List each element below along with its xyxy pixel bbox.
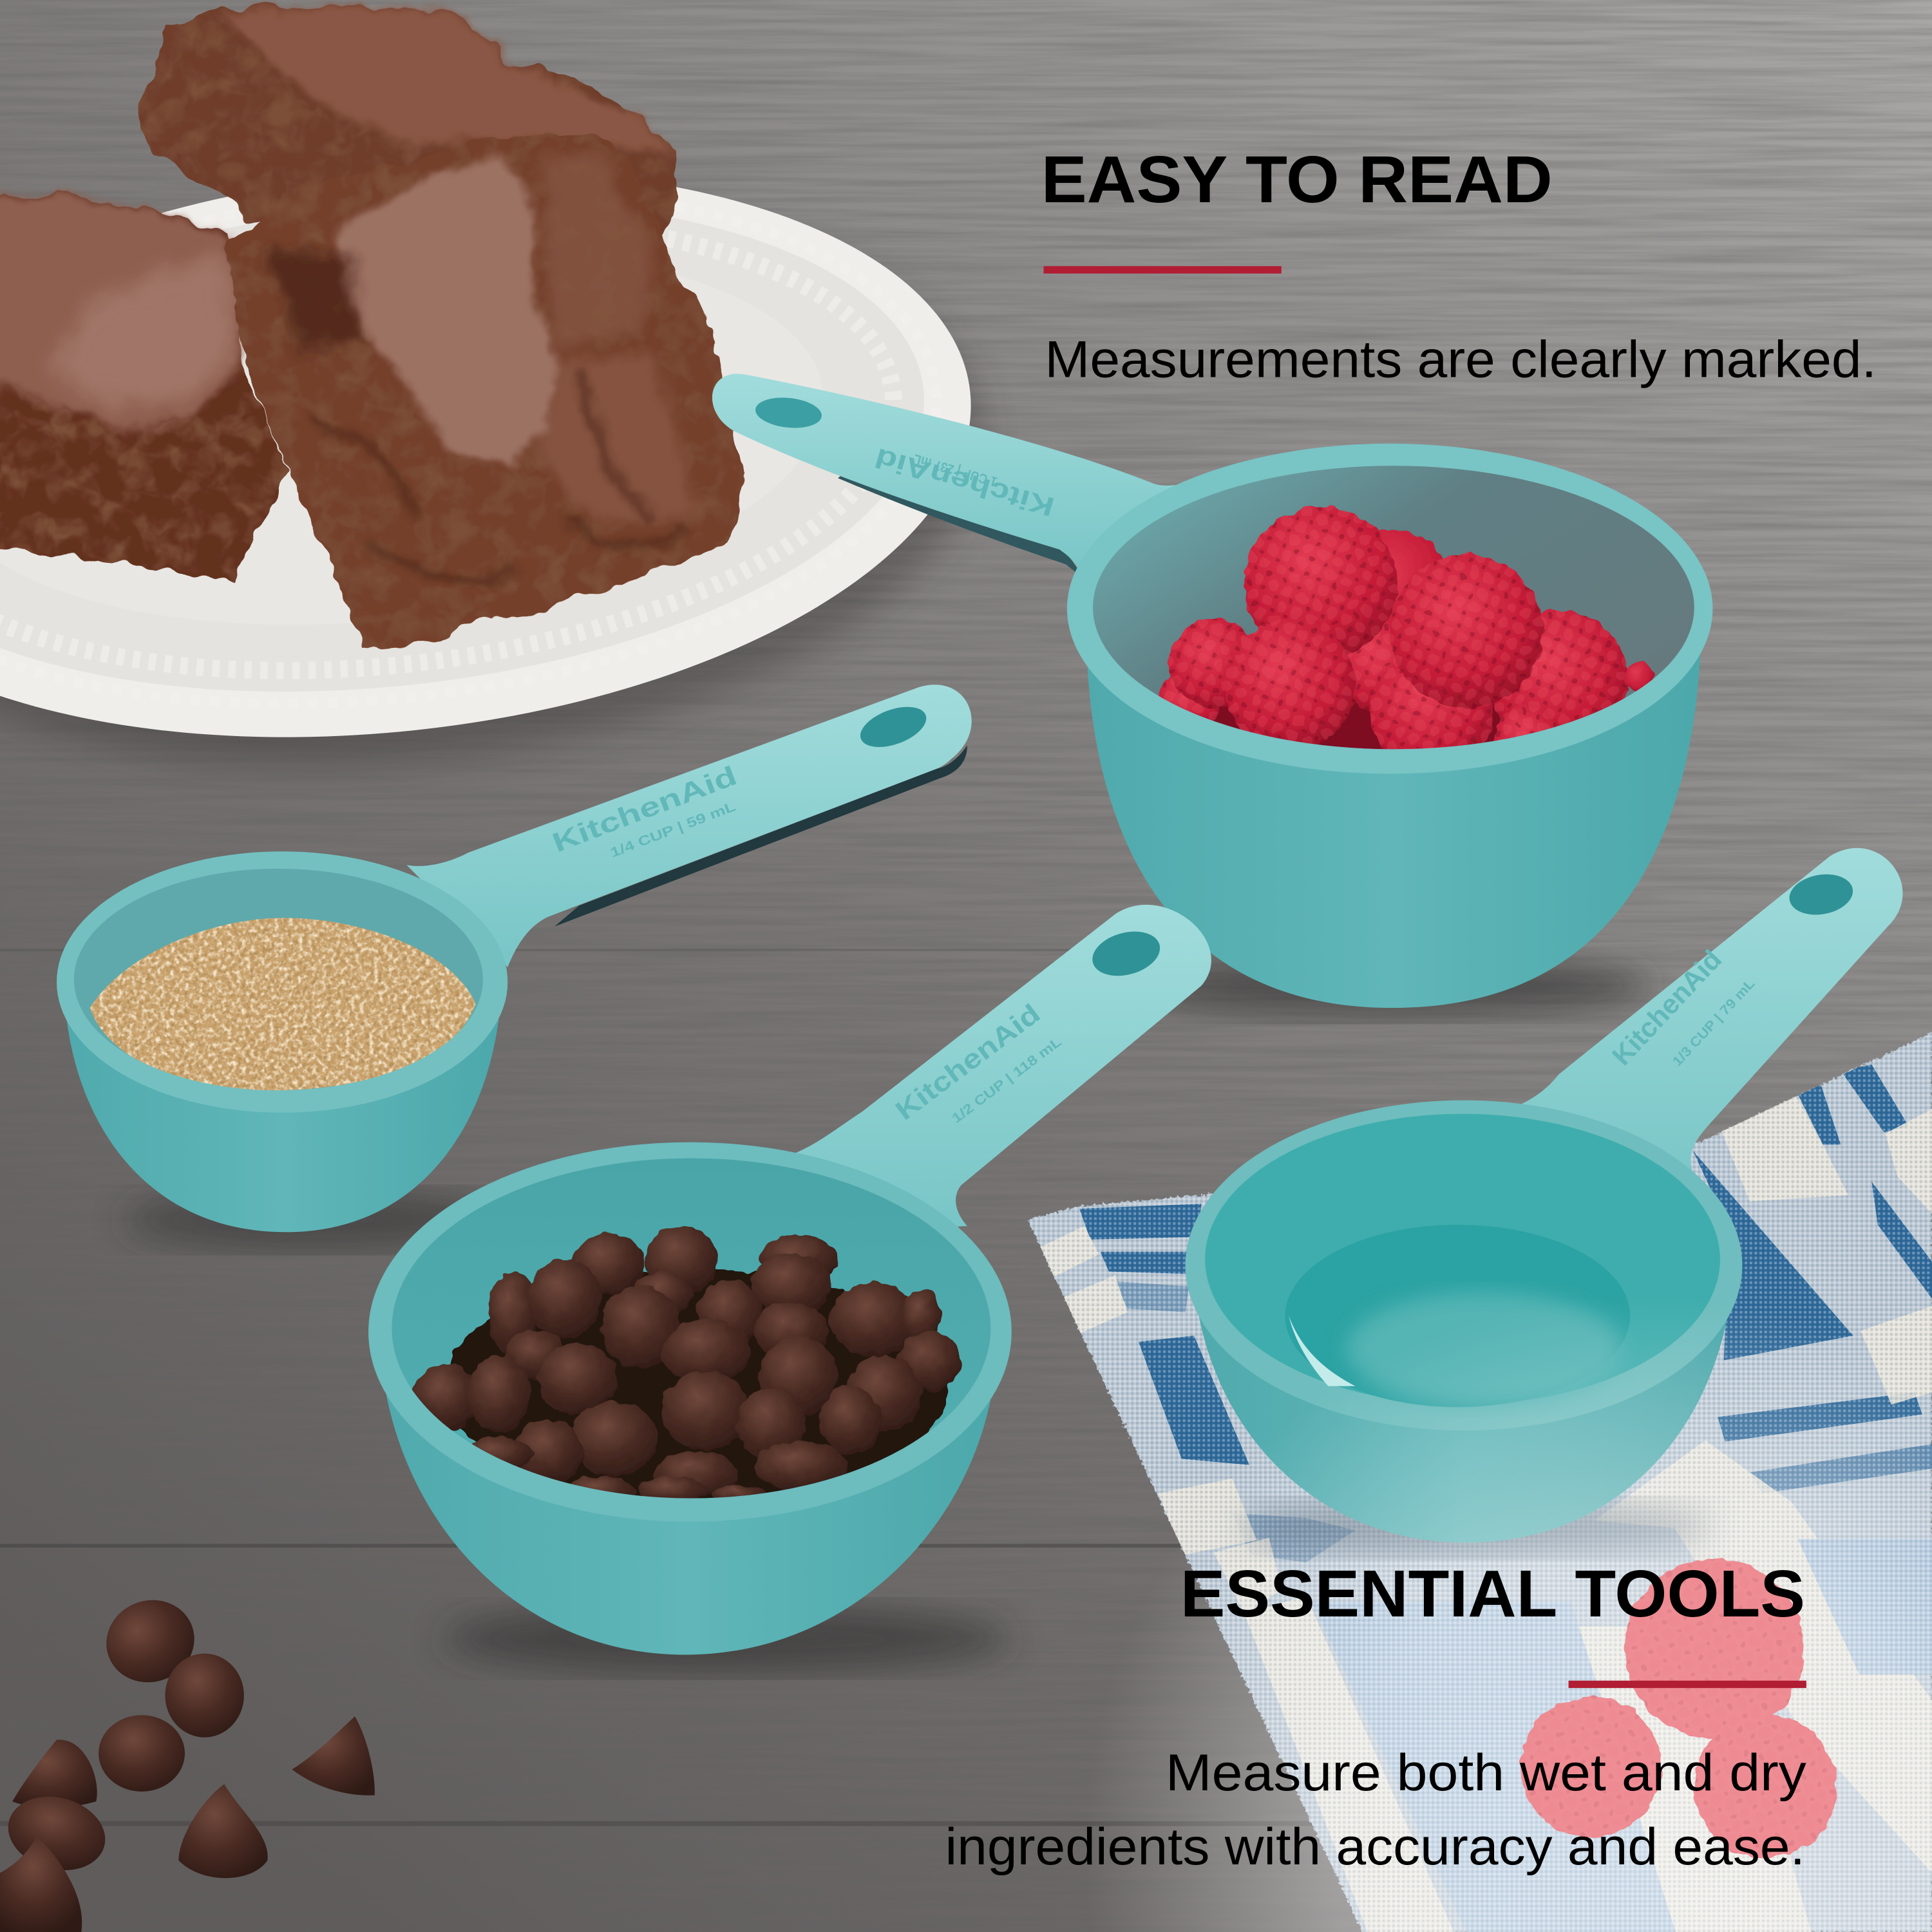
cup handle: left	[406, 685, 972, 967]
cup handle: right: 1/3 CUP | 79 mL	[1670, 976, 1758, 1069]
cup handle: top	[712, 374, 1232, 579]
description: easy to read: Measurements are clearly marked.	[1045, 330, 1877, 388]
heading: easy to read: EASY TO READ	[1041, 142, 1553, 216]
cup handle: left: KitchenAid	[548, 760, 741, 858]
towel	[1010, 1023, 1932, 1932]
heading: essential tools: ESSENTIAL TOOLS	[1180, 1556, 1805, 1631]
cup handle: right	[1510, 848, 1902, 1201]
cup handle: top: 1 CUP | 237 mL	[912, 451, 999, 489]
description: essential tools	[945, 1744, 1807, 1876]
cup: 1/3 cup empty	[1186, 848, 1902, 1555]
white haze behind lower text	[862, 1257, 1932, 1932]
brownie: back	[138, 5, 675, 235]
cup handle: right: KitchenAid	[1606, 944, 1727, 1071]
loose chocolate chips	[0, 1588, 375, 1932]
towel: cream stripes	[1032, 1072, 1932, 1932]
raspberries	[1157, 506, 1654, 776]
text block: essential tools	[945, 1556, 1807, 1876]
chocolate chips in cup	[413, 1226, 961, 1506]
towel: pale blue panels	[1312, 1539, 1932, 1932]
cup handle: centre: 1/2 CUP | 118 mL	[949, 1034, 1065, 1126]
cup handle: centre: KitchenAid	[889, 998, 1046, 1126]
cup handle: left: 1/4 CUP | 59 mL	[608, 799, 738, 860]
white plate	[0, 115, 1012, 819]
brownie: left	[0, 194, 286, 579]
brownie: front	[229, 133, 744, 647]
cup: 1/2 cup with chocolate chips	[368, 905, 1211, 1673]
faded raspberries on towel	[1520, 1558, 1837, 1858]
cup: 1/4 cup with sugar	[57, 685, 972, 1249]
description: essential tools: ingredients with accuracy and ease.	[945, 1818, 1805, 1876]
cup handle: top: KitchenAid	[871, 442, 1057, 522]
description: essential tools: Measure both wet and dry	[1166, 1744, 1807, 1802]
cup handle: centre	[788, 905, 1211, 1232]
text block: easy to read	[1041, 142, 1877, 388]
cup: 1 cup with raspberries	[712, 374, 1712, 1018]
towel: blue stripes	[1079, 1065, 1932, 1562]
sugar	[90, 918, 476, 1090]
